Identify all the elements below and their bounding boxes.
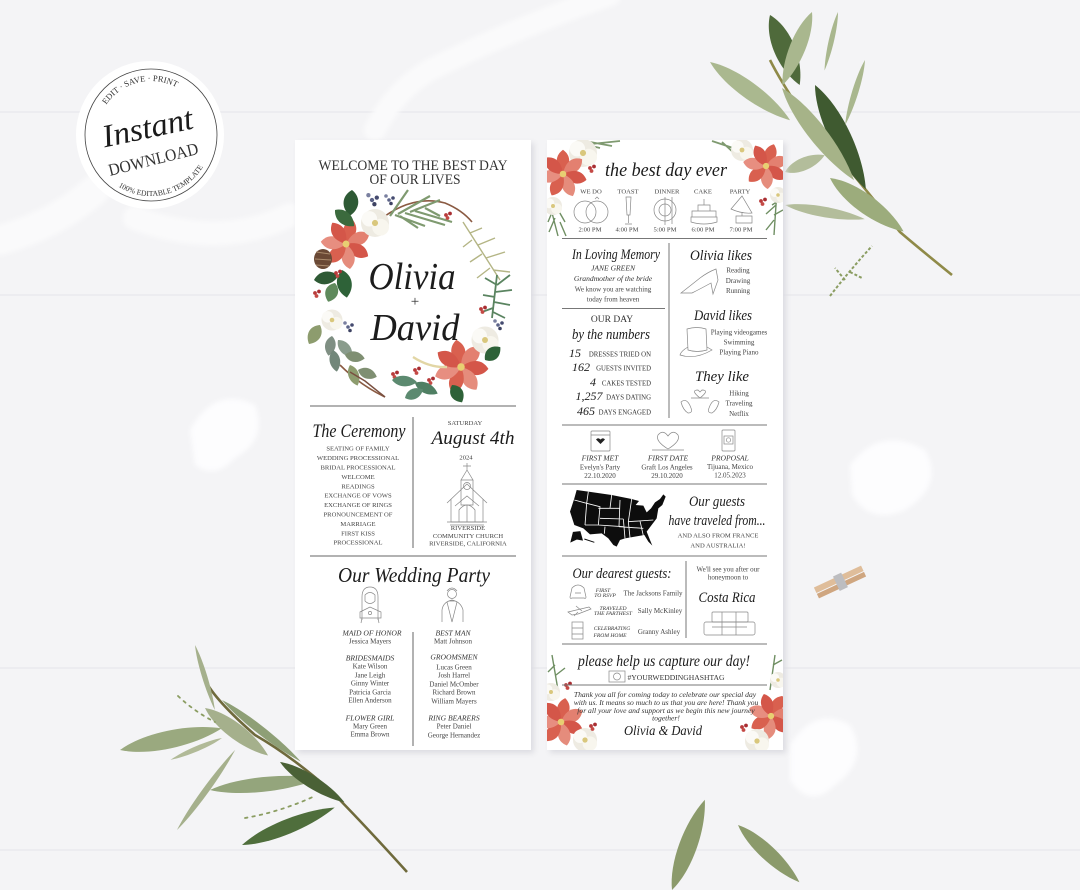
- badge: instant download: EDIT · SAVE · PRINT: [102, 76, 179, 104]
- thank you note: [574, 690, 759, 739]
- icon: top hat: [680, 328, 712, 357]
- our day by the numbers: DAYS DATING: [606, 394, 651, 402]
- in loving memory: Grandmother of the bride: [574, 274, 653, 283]
- panel: welcome and ceremony card: [295, 140, 531, 750]
- our dearest guests: FROM HOME: [592, 633, 627, 639]
- ceremony order: The Ceremony: [312, 421, 406, 442]
- schedule timeline: CAKE: [694, 188, 712, 196]
- groom's party: Josh Harrel: [438, 672, 470, 680]
- schedule timeline: DINNER: [655, 188, 680, 196]
- our day by the numbers: DAYS ENGAGED: [599, 410, 651, 416]
- map of the USA: [570, 490, 666, 547]
- in loving memory: [571, 247, 660, 304]
- icon: champagne glass: [625, 197, 632, 224]
- our dearest guests: THE FARTHEST: [594, 611, 633, 617]
- groom's party: Peter Daniel: [437, 722, 471, 730]
- our day by the numbers: [569, 315, 651, 418]
- groom's party: [427, 628, 480, 740]
- icon: airplane: [568, 606, 591, 616]
- guests travelled text: AND ALSO FROM FRANCE: [678, 532, 758, 540]
- icon: doves: [681, 390, 719, 413]
- icon: camera: [609, 671, 625, 682]
- badge: instant download: 100% EDITABLE TEMPLATE: [118, 164, 203, 196]
- our dearest guests: TO RSVP: [594, 593, 616, 599]
- in loving memory: JANE GREEN: [591, 264, 636, 272]
- names: +: [411, 294, 419, 310]
- schedule timeline: 5:00 PM: [654, 226, 677, 234]
- names: Olivia: [368, 256, 456, 298]
- our dearest guests: [568, 566, 683, 639]
- david likes: David likes: [693, 308, 752, 324]
- our day by the numbers: CAKES TESTED: [602, 380, 651, 388]
- please help capture: please help us capture our day!: [577, 653, 750, 670]
- bride's party: Jessica Mayers: [349, 638, 391, 646]
- date and venue: COMMUNITY CHURCH: [433, 533, 503, 540]
- ceremony order: MARRIAGE: [340, 521, 376, 528]
- david likes: Playing Piano: [719, 348, 759, 356]
- panel shadows: [298, 143, 786, 753]
- milestones: Tijuana, Mexico: [707, 463, 754, 471]
- our day by the numbers: 1,257: [576, 389, 604, 403]
- icon: suitcases: [704, 612, 755, 635]
- milestones: FIRST MET: [581, 454, 619, 462]
- olive branch top right: [705, 9, 952, 296]
- they like: Netflix: [729, 410, 749, 418]
- our dearest guests: The Jacksons Family: [623, 590, 683, 598]
- milestones: 12.05.2023: [714, 472, 746, 480]
- our dearest guests: Our dearest guests:: [572, 566, 672, 582]
- date and venue: SATURDAY: [448, 420, 483, 427]
- thank you note: Thank you all for coming today to celebrate our special day: [574, 690, 757, 699]
- badge: instant download: [76, 61, 224, 209]
- thank you note: Olivia & David: [624, 724, 703, 739]
- bride's party: FLOWER GIRL: [345, 714, 394, 722]
- title: WELCOME TO THE BEST DAY: [318, 158, 508, 174]
- names: David: [370, 307, 460, 349]
- honeymoon: We'll see you after our: [697, 566, 760, 574]
- clothespin: [813, 564, 867, 600]
- ceremony order: SEATING OF FAMILY: [326, 446, 390, 452]
- they like: Traveling: [726, 400, 753, 408]
- groom's party: George Hernandez: [428, 732, 480, 740]
- milestones: [580, 430, 754, 480]
- bride's party: Kate Wilson: [353, 662, 388, 670]
- david likes: Swimming: [724, 338, 755, 346]
- icon: shoe: [681, 269, 718, 294]
- schedule timeline: 4:00 PM: [616, 226, 639, 234]
- ceremony order: BRIDAL PROCESSIONAL: [320, 464, 396, 472]
- icon: groom: [442, 588, 463, 622]
- ceremony order: FIRST KISS: [341, 530, 375, 538]
- bride's party: [341, 628, 402, 738]
- they like: [681, 369, 753, 418]
- icon: ring box: [722, 430, 735, 451]
- icon: bride: [360, 587, 381, 623]
- our dearest guests: Sally McKinley: [638, 607, 683, 615]
- honeymoon: honeymoon to: [708, 574, 749, 582]
- guests travelled text: have traveled from...: [668, 513, 766, 529]
- date and venue: 2024: [459, 454, 473, 462]
- badge: instant download: Instant: [98, 100, 197, 154]
- our day by the numbers: OUR DAY: [591, 315, 633, 325]
- milestones: 29.10.2020: [651, 472, 683, 480]
- date and venue: RIVERSIDE: [451, 525, 485, 532]
- david likes: Playing videogames: [711, 328, 768, 336]
- groom's party: Daniel McOmber: [429, 680, 479, 688]
- wedding party heading: Our Wedding Party: [338, 563, 491, 587]
- david likes: [680, 308, 768, 357]
- schedule timeline: TOAST: [617, 188, 639, 196]
- they like: Hiking: [729, 390, 749, 398]
- guests travelled text: AND AUSTRALIA!: [690, 542, 746, 550]
- bride's party: Mary Green: [353, 722, 388, 730]
- schedule timeline: 6:00 PM: [692, 226, 715, 234]
- icon: gramophone: [731, 196, 752, 223]
- title: OF OUR LIVES: [370, 172, 460, 188]
- milestones: Evelyn's Party: [580, 464, 621, 472]
- thank you note: for all your love and support as we begin this new journey: [577, 706, 755, 715]
- groom's party: Richard Brown: [433, 688, 476, 696]
- badge: instant download: DOWNLOAD: [106, 139, 200, 180]
- date and venue: [429, 420, 514, 548]
- groom's party: William Mayers: [431, 698, 477, 706]
- honeymoon: Costa Rica: [698, 590, 756, 606]
- honeymoon: [697, 566, 760, 635]
- groom's party: RING BEARERS: [427, 714, 480, 722]
- icon: rings: [574, 197, 608, 223]
- bride's party: BRIDESMAIDS: [346, 654, 394, 662]
- groom's party: Matt Johnson: [434, 638, 472, 646]
- olive leaves bottom centre: [664, 797, 804, 890]
- our dearest guests: CELEBRATING: [594, 626, 630, 632]
- white petals: [190, 399, 932, 796]
- our day by the numbers: 465: [577, 404, 595, 418]
- olive branch bottom left: [118, 644, 407, 872]
- bride's party: MAID OF HONOR: [341, 628, 402, 638]
- ceremony order: [312, 421, 406, 546]
- please help capture: #YOURWEDDINGHASHTAG: [628, 673, 725, 682]
- groom's party: BEST MAN: [435, 628, 471, 638]
- ceremony order: WELCOME: [341, 474, 375, 481]
- icon: dinner plate: [654, 197, 676, 225]
- milestones: FIRST DATE: [647, 454, 689, 462]
- heading: the best day ever: the best day ever: [605, 160, 728, 181]
- bride's party: Emma Brown: [350, 730, 390, 738]
- names: [368, 256, 460, 349]
- ceremony order: EXCHANGE OF VOWS: [324, 492, 392, 500]
- milestones: Graft Los Angeles: [641, 464, 693, 472]
- title: [318, 158, 508, 188]
- bride's party: Ginny Winter: [351, 680, 390, 688]
- in loving memory: We know you are watching: [575, 286, 652, 294]
- schedule timeline: 7:00 PM: [730, 226, 753, 234]
- icon: telephone: [570, 585, 586, 598]
- please help capture: [577, 653, 750, 682]
- olivia likes: Drawing: [726, 277, 751, 285]
- panel: timeline and details card: [547, 140, 783, 750]
- thank you note: with us. It means so much to us that you are here! Thank you: [574, 698, 759, 707]
- date and venue: RIVERSIDE, CALIFORNIA: [429, 540, 507, 548]
- floral wreath: [304, 189, 512, 405]
- in loving memory: today from heaven: [587, 296, 640, 304]
- ceremony order: WEDDING PROCESSIONAL: [317, 455, 399, 462]
- ceremony order: READINGS: [341, 484, 375, 490]
- schedule timeline: WE DO: [580, 188, 602, 196]
- in loving memory: In Loving Memory: [571, 247, 660, 263]
- our day by the numbers: GUESTS INVITED: [596, 366, 651, 372]
- schedule timeline: [574, 188, 753, 234]
- our day by the numbers: by the numbers: [572, 327, 650, 343]
- our dearest guests: Granny Ashley: [638, 628, 681, 636]
- icon: church: [447, 463, 487, 525]
- milestones: 22.10.2020: [584, 472, 616, 480]
- groom's party: GROOMSMEN: [430, 652, 479, 662]
- ceremony order: PROCESSIONAL: [333, 540, 383, 546]
- milestones: PROPOSAL: [710, 454, 749, 462]
- our dearest guests: FIRST: [595, 588, 611, 594]
- guests travelled text: Our guests: [689, 494, 745, 510]
- our day by the numbers: 15: [569, 346, 581, 360]
- thank you note: together!: [652, 714, 680, 722]
- bride's party: Jane Leigh: [355, 672, 386, 680]
- guests travelled text: [668, 494, 766, 550]
- icon: heart knot: [652, 432, 684, 450]
- corner florals: [547, 140, 783, 750]
- schedule timeline: 2:00 PM: [579, 226, 602, 234]
- bride's party: Patricia Garcia: [349, 688, 392, 696]
- olivia likes: Reading: [726, 266, 750, 274]
- our day by the numbers: 4: [590, 375, 596, 389]
- olivia likes: [681, 248, 752, 295]
- ceremony order: EXCHANGE OF RINGS: [324, 502, 392, 509]
- icon: calendar: [591, 431, 610, 451]
- lace ribbon: [0, 0, 610, 240]
- olivia likes: Olivia likes: [690, 248, 752, 264]
- groom's party: Lucas Green: [436, 664, 472, 672]
- ceremony order: PRONOUNCEMENT OF: [324, 512, 393, 518]
- icon: luggage: [572, 622, 583, 639]
- they like: They like: [695, 369, 749, 385]
- bride's party: Ellen Anderson: [348, 696, 392, 704]
- our day by the numbers: 162: [572, 360, 590, 374]
- date and venue: August 4th: [429, 428, 514, 449]
- our day by the numbers: DRESSES TRIED ON: [589, 352, 651, 358]
- icon: wedding cake: [691, 199, 717, 224]
- our dearest guests: TRAVELED: [599, 606, 627, 612]
- schedule timeline: PARTY: [730, 188, 751, 196]
- olivia likes: Running: [726, 287, 751, 295]
